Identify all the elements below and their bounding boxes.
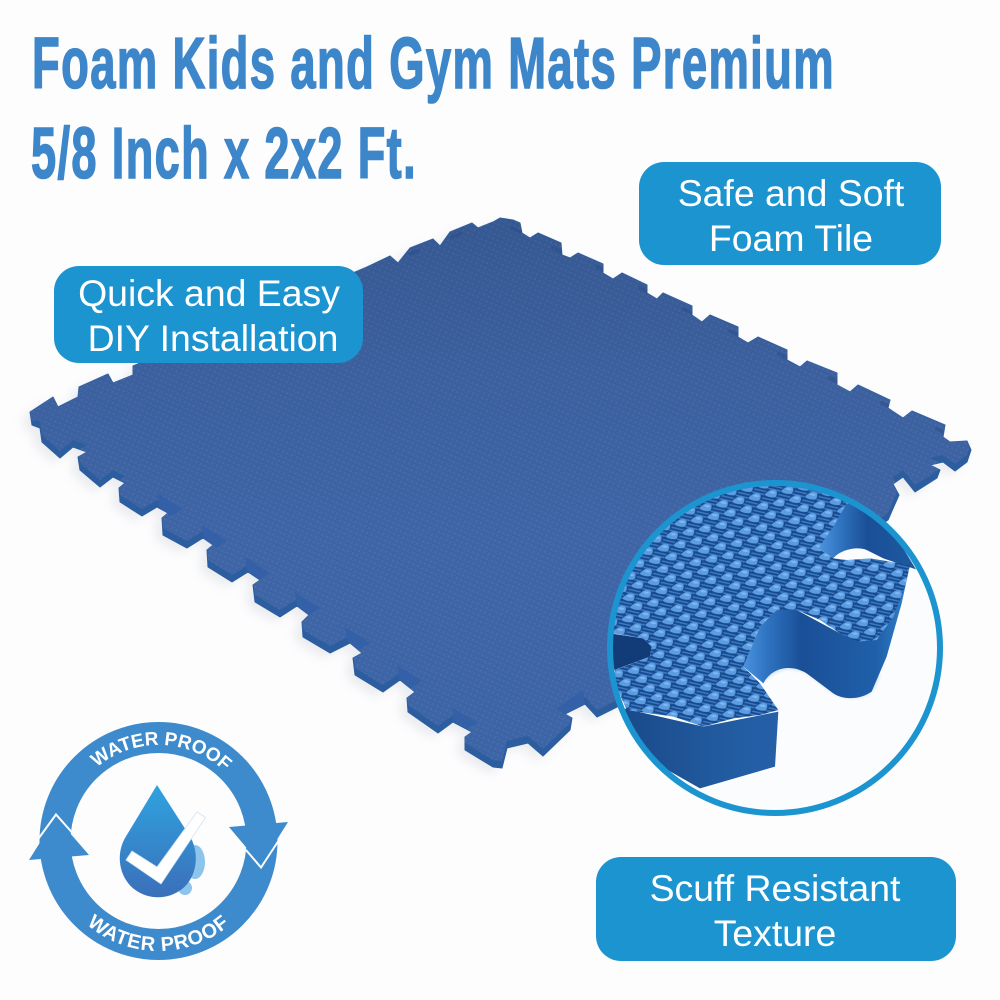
- icon: small water drops: [178, 845, 205, 895]
- icon: check mark: [126, 812, 206, 884]
- side face: lower left block: [623, 708, 778, 788]
- arrow: left, pointing up: [29, 814, 89, 860]
- side face: middle notch: [743, 565, 910, 698]
- title: 5/8 Inch x 2x2 Ft.: [31, 114, 417, 194]
- inset: texture close-up: [600, 470, 940, 813]
- badge: water proof: [29, 722, 288, 960]
- callout: quick and easy: [54, 266, 363, 363]
- textured top surface: [614, 486, 910, 727]
- callout: safe and soft: Foam Tile: [709, 217, 873, 259]
- callout: quick and easy: Quick and Easy: [78, 272, 340, 314]
- callout: quick and easy: DIY Installation: [88, 317, 338, 359]
- callout: safe and soft: [639, 162, 941, 265]
- arrow: right, pointing down: [229, 822, 288, 868]
- title: [31, 24, 835, 194]
- side face: upper notch: [818, 503, 916, 569]
- callout: safe and soft: Safe and Soft: [678, 172, 905, 214]
- callout: scuff resistant: Texture: [714, 912, 836, 954]
- side face: left dark notch: [613, 634, 652, 670]
- ring text: top: WATER PROOF: [89, 732, 233, 768]
- ring: [55, 738, 262, 944]
- icon: water drop: [120, 785, 196, 897]
- ring text: bottom: WATER PROOF: [89, 914, 226, 951]
- callout: scuff resistant: [596, 857, 956, 961]
- foam mat tile: [23, 211, 971, 773]
- callout: scuff resistant: Scuff Resistant: [650, 867, 901, 909]
